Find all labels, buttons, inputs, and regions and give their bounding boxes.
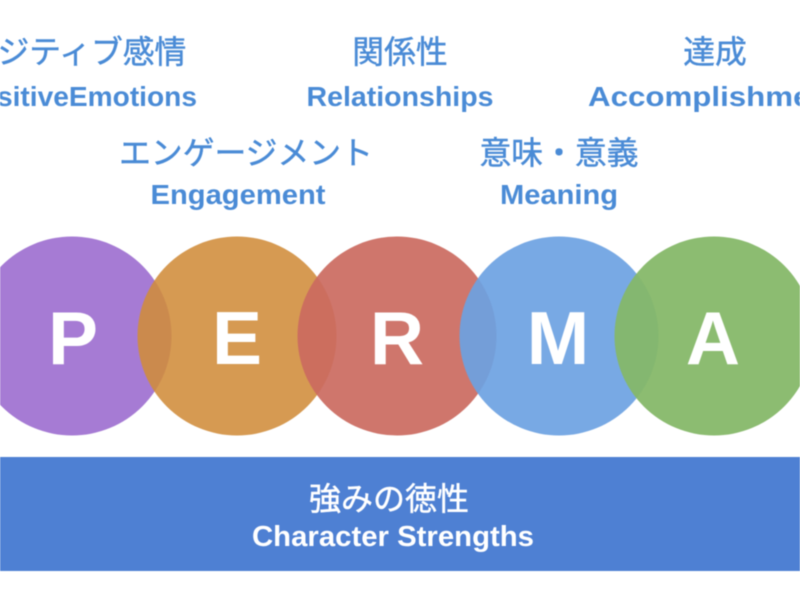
circle: P: P <box>48 296 98 380</box>
label: meaning: Meaning <box>500 179 618 210</box>
circle: E: E <box>212 296 262 380</box>
foundation bar: character strengths: 強みの徳性 <box>309 481 469 517</box>
label: relationships: Relationships <box>306 81 494 112</box>
circle: A: A <box>686 296 740 380</box>
label: positive emotions <box>0 34 197 112</box>
label: relationships: 関係性 <box>352 34 448 70</box>
circle: R <box>298 236 496 436</box>
circle: E <box>138 236 336 436</box>
label: relationships <box>306 34 494 112</box>
circle: M <box>460 236 658 436</box>
circle: P <box>0 236 172 436</box>
circle: R: R <box>370 296 424 380</box>
circle: M: M <box>527 296 589 380</box>
label: accomplishment <box>588 34 800 112</box>
label: meaning <box>480 135 638 210</box>
label: engagement: エンゲージメント <box>119 135 373 171</box>
label: accomplishment: 達成 <box>683 34 747 70</box>
label: engagement: Engagement <box>150 179 326 210</box>
label: meaning: 意味・意義 <box>480 135 638 171</box>
label: engagement <box>119 135 373 210</box>
circle: A <box>614 236 800 436</box>
foundation bar: character strengths: Character Strengths <box>252 521 534 553</box>
foundation bar: character strengths <box>0 457 800 571</box>
